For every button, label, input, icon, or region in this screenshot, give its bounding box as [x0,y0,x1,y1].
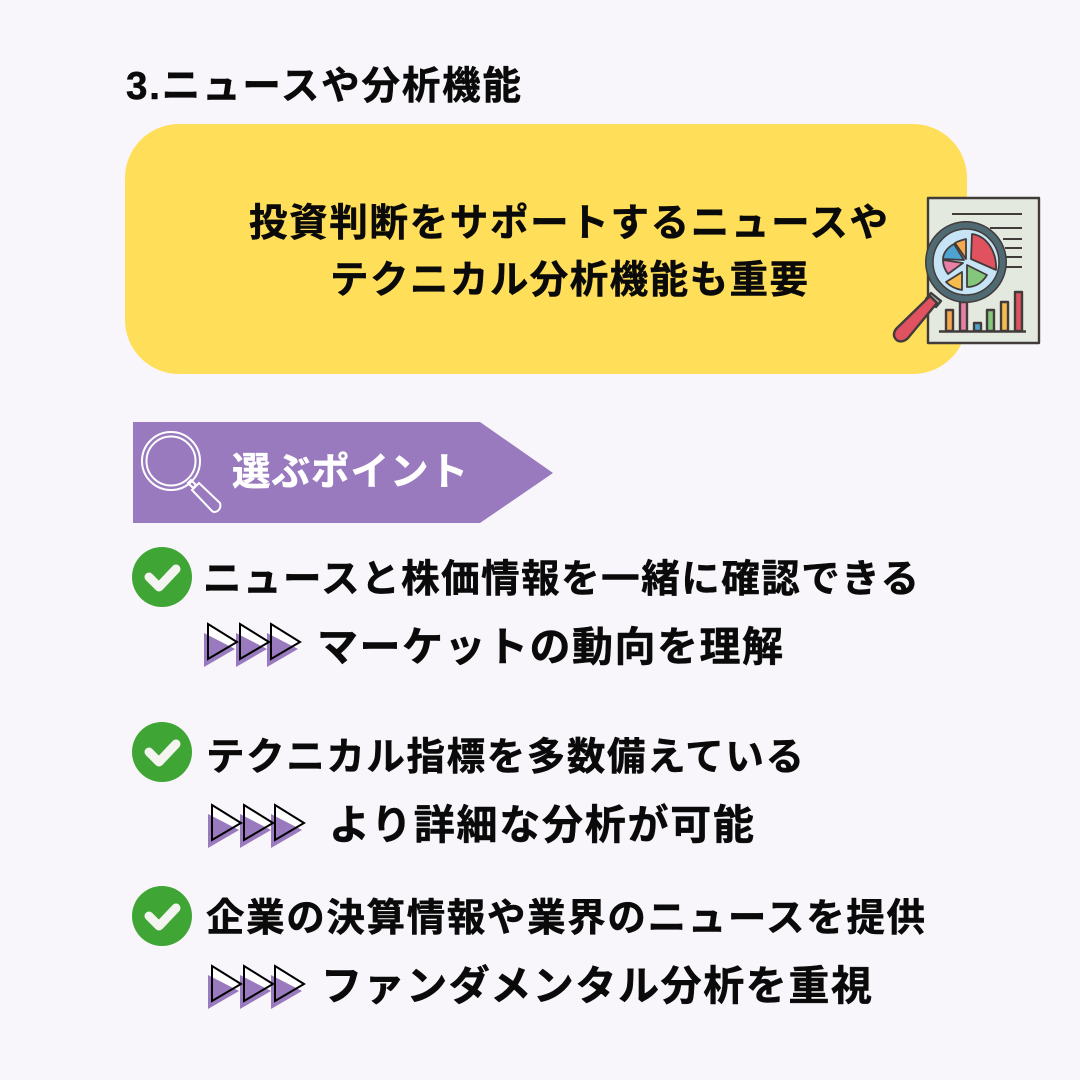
item 1 heading: ニュースと株価情報を一緒に確認できる [203,558,919,601]
magnifier handle [894,293,941,341]
item 1 [132,547,919,670]
icon: white magnifying glass [142,432,220,512]
panel text: summary [249,202,888,302]
icon: report with magnifying glass [894,198,1039,343]
icon: green check 3 [132,886,192,946]
pie chart [943,234,996,290]
title: 3.ニュースや分析機能 [126,65,521,108]
banner: 選ぶポイント [133,422,553,523]
icon: triple arrows 3 [208,966,304,1009]
item 1 detail: マーケットの動向を理解 [317,624,783,670]
panel text: summary: テクニカル分析機能も重要 [330,259,808,302]
icon: green check 2 [132,722,192,782]
item 3 detail: ファンダメンタル分析を重視 [321,963,872,1009]
banner text: 選ぶポイント [232,451,468,494]
icon: triple arrows 2 [208,805,304,848]
bar chart [939,292,1026,332]
icon: triple arrows 1 [204,624,300,667]
item 3 [132,886,925,1009]
panel: yellow summary [125,124,967,374]
item 2 detail: より詳細な分析が可能 [329,802,754,848]
magnifier lens [926,222,1006,302]
item 3 heading: 企業の決算情報や業界のニュースを提供 [206,897,925,940]
panel text: summary: 投資判断をサポートするニュースや [249,202,888,245]
icon: green check 1 [132,547,192,607]
item 2 [132,722,804,848]
item 2 heading: テクニカル指標を多数備えている [206,736,804,779]
